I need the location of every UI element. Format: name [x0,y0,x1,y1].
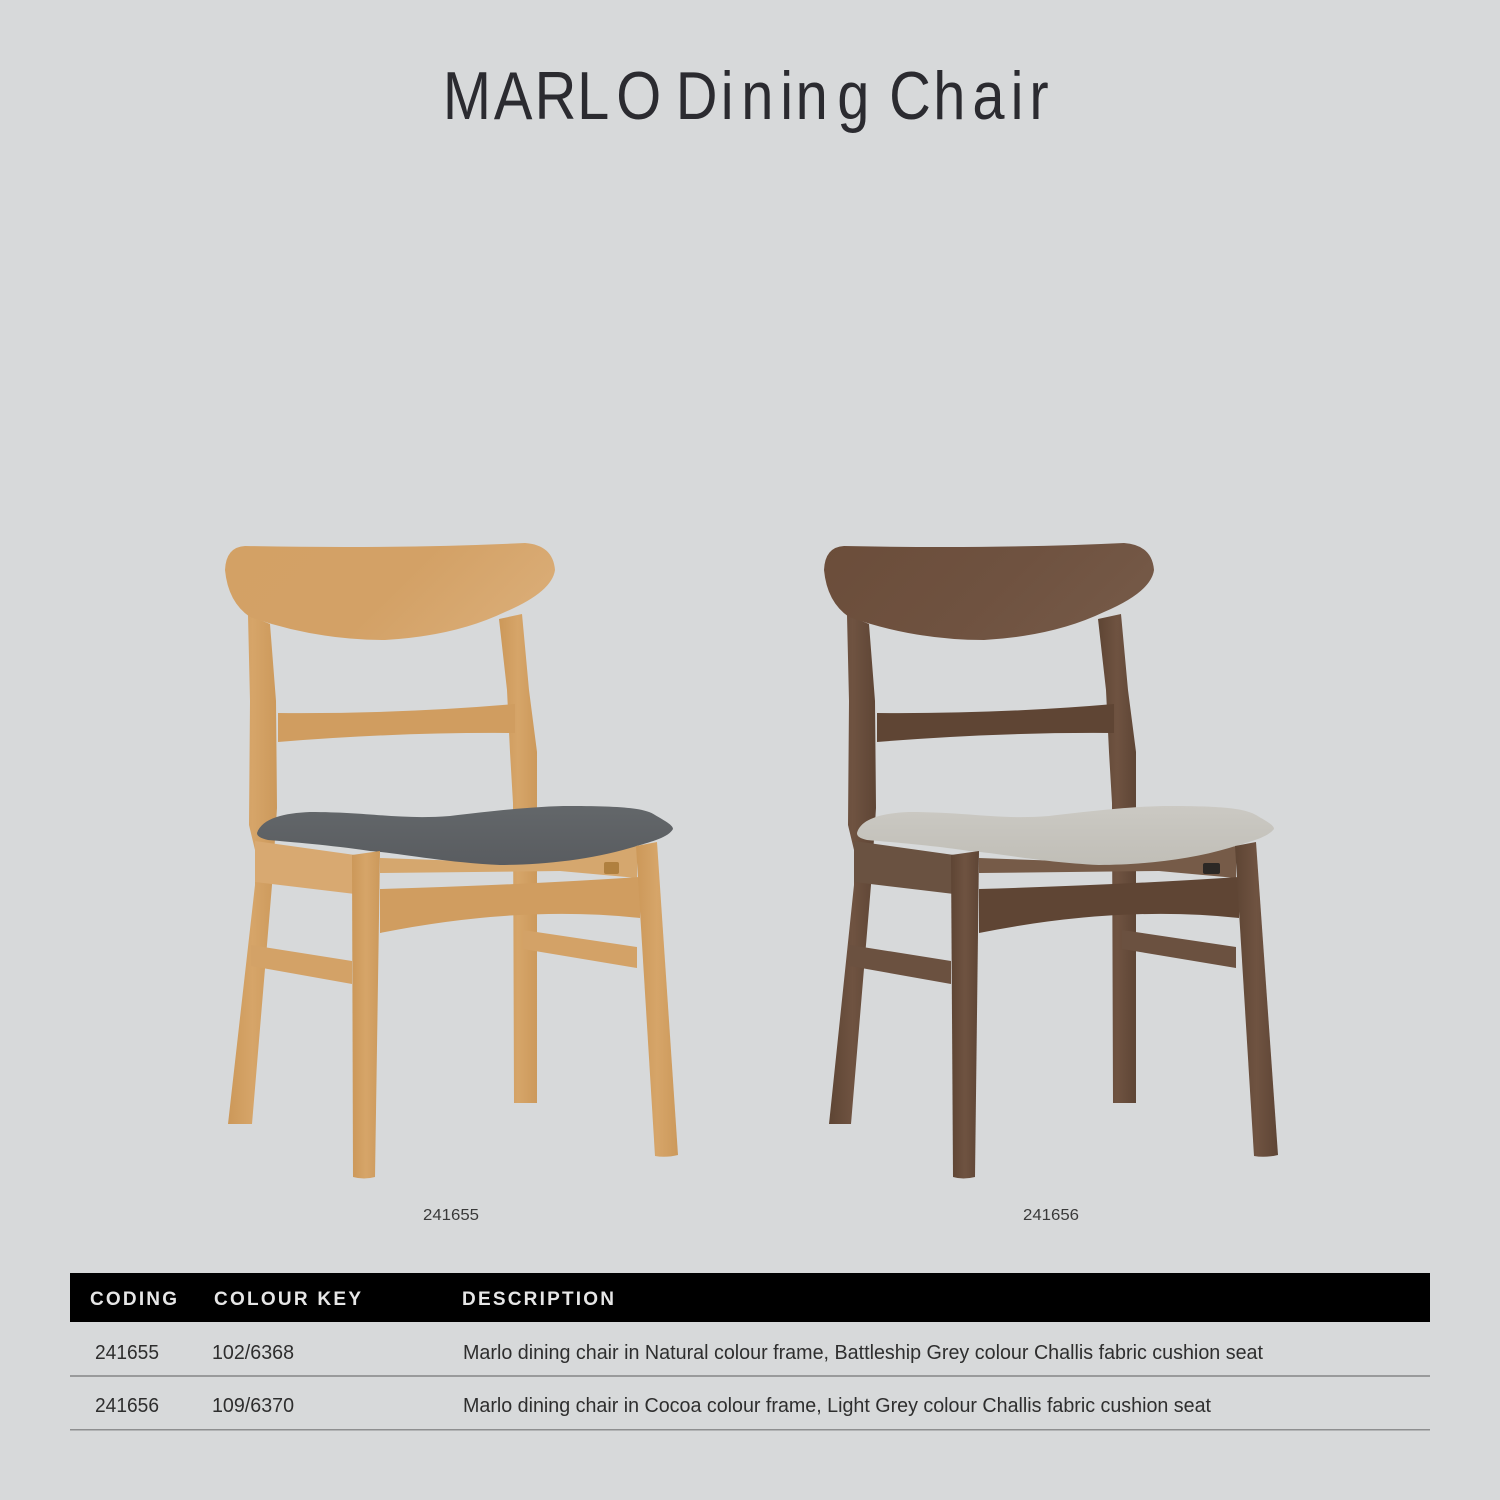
table row: 241655 [70,1342,1430,1377]
left apron [255,841,355,894]
title: MARLO Dining Chair [443,59,1049,134]
rear right upright and leg [499,614,537,1103]
rear right upright and leg [1098,614,1136,1103]
table row: 241655: 241655 [95,1342,159,1364]
seat cushion [257,806,673,865]
front right leg [1235,842,1278,1157]
table row: 241656: 109/6370 [212,1395,294,1417]
table row: 241656 [70,1395,1430,1430]
lower side rails [850,930,1236,984]
front right leg [636,842,678,1157]
chair: cocoa frame, light grey seat [824,543,1278,1178]
left apron [854,841,954,894]
table row: 241656: Marlo dining chair in Cocoa colour frame, Light Grey colour Challis fabric cushion seat [463,1395,1211,1417]
table header: COLOUR KEY [214,1289,361,1310]
chair: natural frame, grey seat [225,543,678,1178]
table header: CODING [90,1289,177,1310]
caption: 241655: 241655 [423,1207,479,1224]
backrest [824,543,1154,640]
table row: 241655: Marlo dining chair in Natural colour frame, Battleship Grey colour Challis fabric cushion seat [463,1342,1263,1364]
seat cushion [857,806,1274,865]
caption: 241656: 241656 [1023,1207,1079,1224]
backrest [225,543,555,640]
back slat [278,704,515,742]
front rail [979,877,1239,933]
seat clip [1203,863,1220,874]
lower side rails [251,930,637,984]
table row: 241656: 241656 [95,1395,159,1417]
front centre leg [352,851,380,1178]
front centre leg [951,851,979,1178]
table header [70,1273,1430,1322]
inner rear rail [979,846,1236,878]
table [70,1273,1430,1430]
back slat [877,704,1114,742]
seat peg [604,862,619,874]
rear left upright and leg [228,615,277,1124]
inner rear rail [380,846,637,878]
rear left upright and leg [829,615,876,1124]
table header: DESCRIPTION [462,1289,614,1310]
front rail [380,877,640,933]
table row: 241655: 102/6368 [212,1342,294,1364]
